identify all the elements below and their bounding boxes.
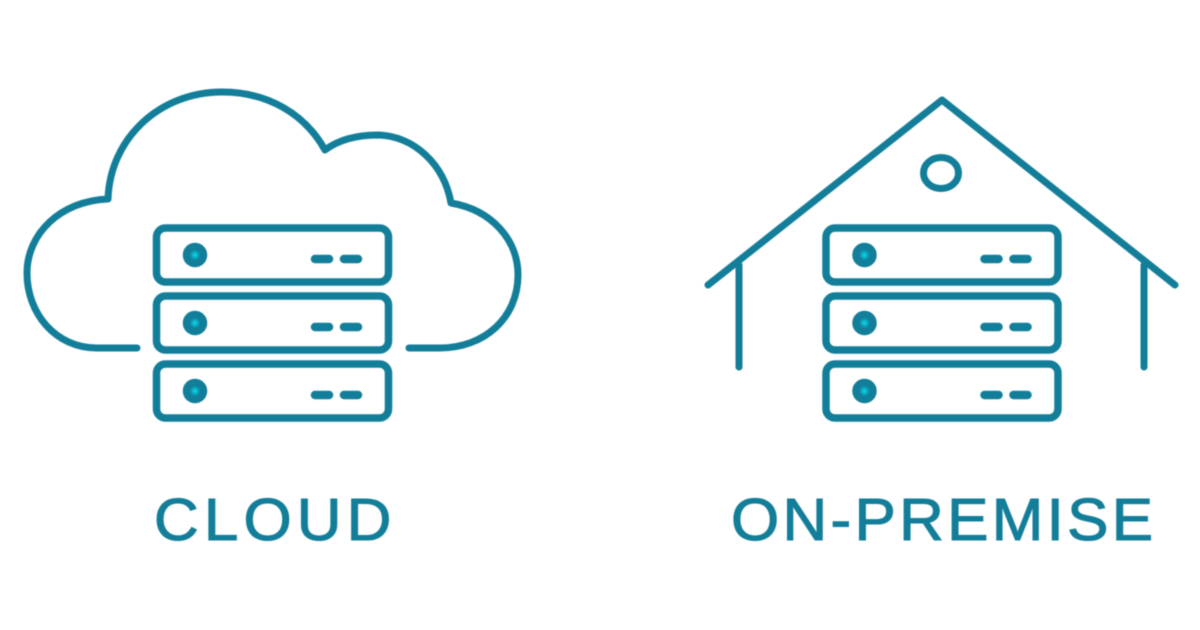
- panel: on-premise: [708, 100, 1175, 553]
- panel: cloud: [27, 92, 518, 553]
- icon: on-premise server stack: [826, 228, 1058, 418]
- icon: house outline: [708, 100, 1175, 367]
- label: cloud: CLOUD: [154, 486, 391, 553]
- label: on-premise: ON-PREMISE: [731, 486, 1153, 553]
- icon: cloud server stack: [156, 228, 388, 418]
- icon: cloud outline: [27, 92, 518, 348]
